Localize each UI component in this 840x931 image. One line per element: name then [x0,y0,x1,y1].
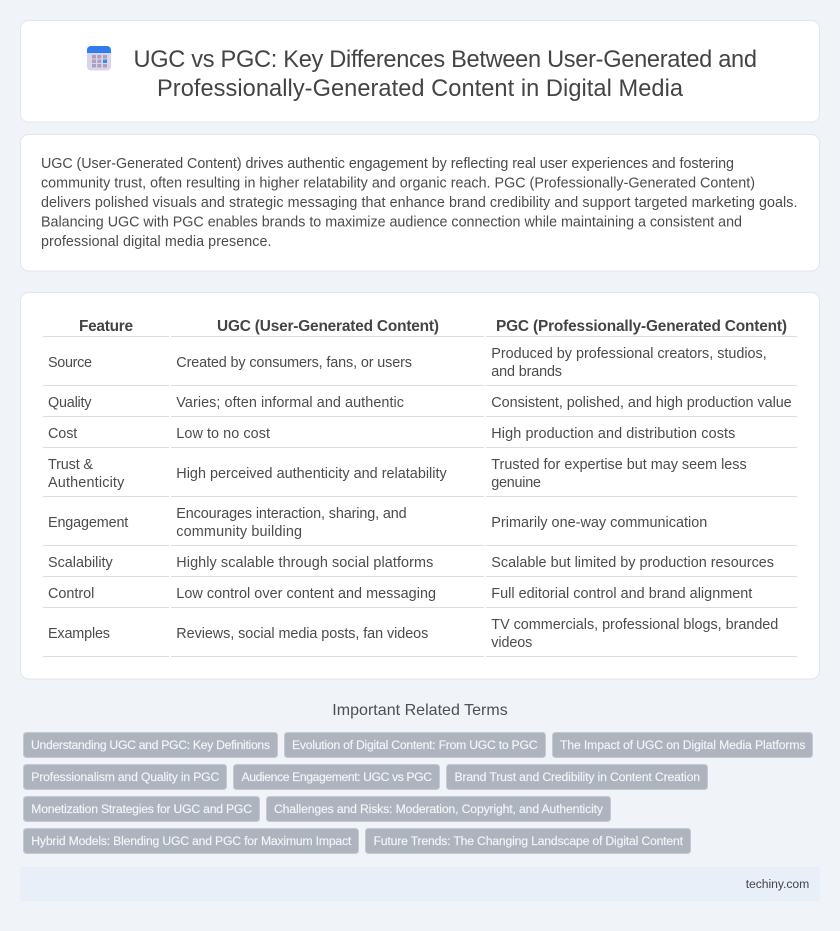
table row: trust and authenticity: High perceived authenticity and relatability [176,466,447,482]
tag group: row 4: Hybrid Models: Blending UGC and PGC for Maximum Impact [31,834,352,848]
table row: quality: Quality [48,395,92,411]
title: Professionally-Generated Content in Digital Media [157,76,684,102]
heading: related terms: Important Related Terms [332,702,508,719]
table row: cost: Cost [48,426,77,442]
tag group: row 1: Evolution of Digital Content: From UGC to PGC [292,738,538,752]
table row: control: Low control over content and messaging [176,586,436,602]
title: UGC vs PGC: Key Differences Between User-Generated and [134,47,757,73]
table row: control [48,586,752,602]
text block: summary: professional digital media presence. [41,234,272,250]
tag group: row 2: Professionalism and Quality in PGC [31,770,219,784]
table row: examples [48,617,778,651]
table row: examples: Reviews, social media posts, fan videos [176,626,428,642]
table row: source: and brands [491,364,562,380]
tag group: row 3 [24,796,610,822]
tag group: row 4: Future Trends: The Changing Landscape of Digital Content [374,834,684,848]
table row: trust and authenticity [48,457,747,491]
table row: control: Control [48,586,94,602]
title [134,47,757,102]
table header row [79,318,787,335]
table row: quality: Varies; often informal and authentic [176,395,404,411]
panel: summary paragraph [20,134,820,271]
tag group: row 2: Brand Trust and Credibility in Content Creation [454,770,700,784]
table row: source: Produced by professional creators, studios, [491,346,767,362]
table row: source: Created by consumers, fans, or users [176,355,412,371]
text block: summary: community trust, often resulting in higher relatability and organic reach. PGC (Professionally-Generated Content) [41,176,755,192]
table row: source [48,346,767,380]
panel: comparison table [20,292,820,679]
table row: trust and authenticity: Authenticity [48,475,125,491]
icon: calendar [87,46,111,70]
table row: quality: Consistent, polished, and high production value [491,395,792,411]
tag group: row 4 [24,828,690,854]
text block: summary: UGC (User-Generated Content) drives authentic engagement by reflecting real user experiences and fostering [41,156,734,172]
table row: engagement: Encourages interaction, sharing, and [176,506,407,522]
tag group: row 1 [24,732,812,758]
text block: summary [41,156,798,250]
table row: scalability: Highly scalable through social platforms [176,555,433,571]
text block: summary: Balancing UGC with PGC enables brands to maximize audience connection while maintaining a consistent and [41,214,742,230]
text block: summary: delivers polished visuals and strategic messaging that enhance brand credibility and support targeted marketing goals. [41,195,798,211]
panel: title header [20,20,820,122]
table row: cost [48,426,735,442]
table row: quality [48,395,792,411]
table row: engagement: Primarily one-way communication [491,515,707,531]
table row: cost: Low to no cost [176,426,270,442]
tag group: row 2: Audience Engagement: UGC vs PGC [242,770,432,784]
tag group: row 2 [24,764,708,790]
table row: trust and authenticity: genuine [491,475,541,491]
table row: scalability [48,555,774,571]
tag group: row 1: The Impact of UGC on Digital Media Platforms [560,738,806,752]
tag group: row 3: Challenges and Risks: Moderation, Copyright, and Authenticity [274,802,604,816]
table row: examples: Examples [48,626,110,642]
table row: source: Source [48,355,92,371]
section: important related terms [24,702,812,854]
table row: engagement [48,506,707,540]
footer bar [20,867,820,901]
table row: examples: videos [491,635,532,651]
table row: examples: TV commercials, professional blogs, branded [491,617,778,633]
tag group: row 3: Monetization Strategies for UGC and PGC [31,802,252,816]
table row: engagement: community building [176,524,302,540]
footer bar: techiny.com [746,877,809,891]
table row: scalability: Scalable but limited by production resources [491,555,774,571]
table row: cost: High production and distribution costs [491,426,735,442]
table row: trust and authenticity: Trusted for expertise but may seem less [491,457,747,473]
tag group: row 1: Understanding UGC and PGC: Key Definitions [31,738,270,752]
table header row: Feature [79,318,133,335]
table header row: PGC (Professionally-Generated Content) [496,318,787,335]
table row: trust and authenticity: Trust & [48,457,93,473]
table header row: UGC (User-Generated Content) [217,318,439,335]
table row: control: Full editorial control and brand alignment [491,586,752,602]
table row: engagement: Engagement [48,515,128,531]
table row: scalability: Scalability [48,555,113,571]
